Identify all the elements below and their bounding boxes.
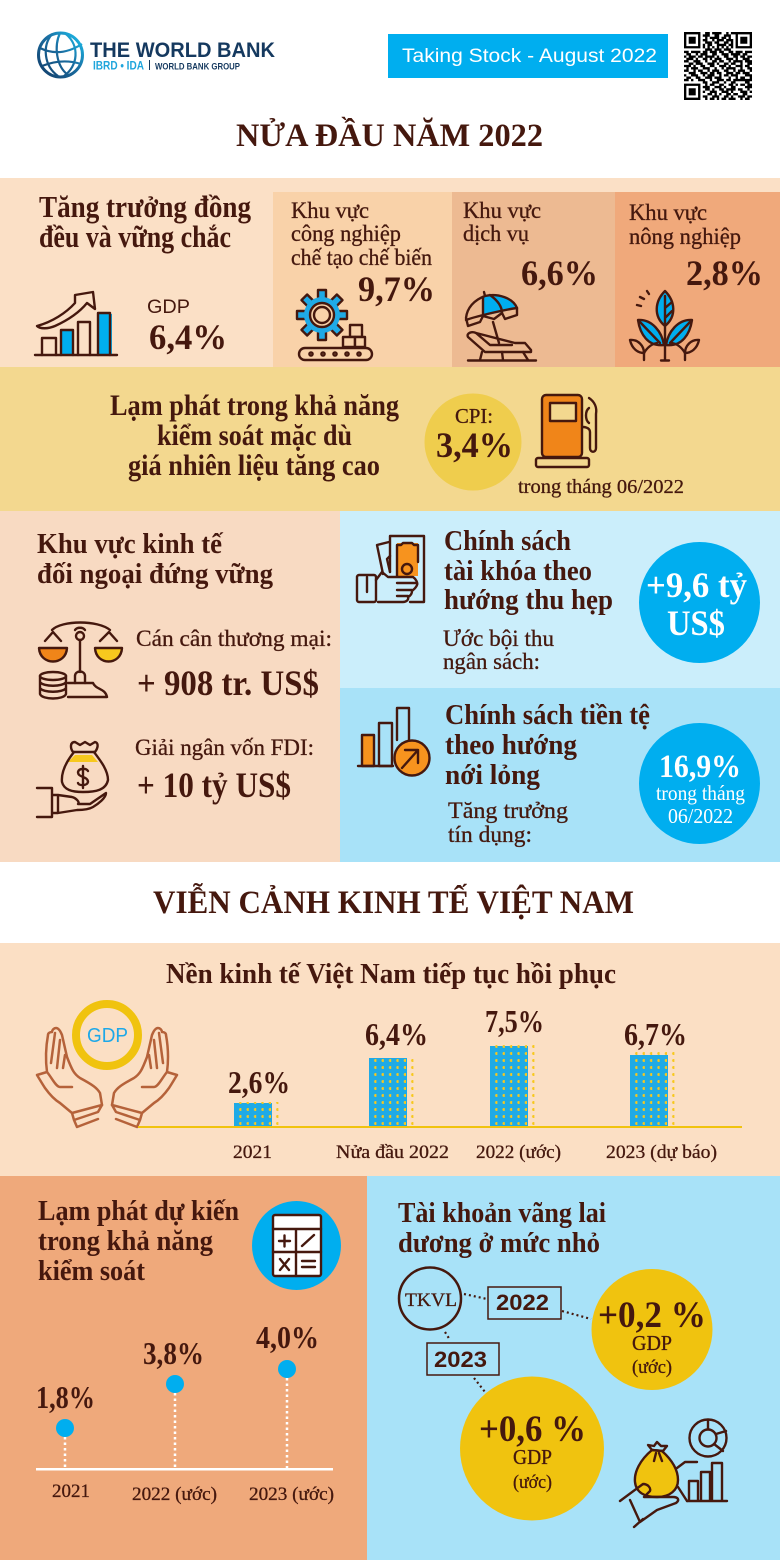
circle: credit value: 16,9% — [659, 749, 741, 785]
logo: The World Bank — [38, 33, 275, 77]
lollipop chart: inflation: 2021 — [52, 1481, 90, 1502]
circle: 2022 current account — [592, 1269, 712, 1390]
label: budget surplus — [443, 626, 554, 674]
heading: current account — [398, 1197, 606, 1259]
panel: services sector — [452, 192, 615, 368]
sector label: chế tạo chế biến — [291, 245, 432, 270]
panel: current account — [367, 1176, 780, 1560]
panel: GDP recovery chart — [0, 943, 780, 1176]
icon: hands holding GDP ring: GDP — [87, 1025, 128, 1047]
icon: money in hand — [357, 536, 424, 602]
circle: 2022 current account: (ước) — [632, 1357, 672, 1378]
circle: surplus value — [639, 542, 760, 663]
lollipop chart: inflation: 2023 (ước) — [249, 1484, 334, 1505]
icon: gear and conveyor — [297, 290, 372, 360]
panel: agriculture sector — [615, 192, 780, 368]
label: credit growth: Tăng trưởng — [448, 798, 569, 823]
bar chart: GDP growth — [138, 1003, 742, 1163]
report tag — [388, 34, 668, 78]
label: budget surplus: ngân sách: — [443, 649, 540, 674]
heading: fiscal policy — [444, 525, 613, 616]
sector label — [463, 198, 541, 246]
bar chart: GDP growth: 2021 — [233, 1142, 272, 1163]
diagram: current account links: 2023 — [434, 1347, 487, 1372]
label: credit growth — [448, 798, 569, 847]
heading: inflation — [110, 389, 399, 482]
bar chart: GDP growth: Nửa đầu 2022 — [336, 1142, 449, 1163]
CPI circle — [424, 394, 522, 490]
heading: inflation forecast — [38, 1195, 239, 1287]
circle: 2022 current account: +0,2 % — [598, 1295, 706, 1336]
heading: inflation forecast: Lạm phát dự kiến — [38, 1195, 239, 1227]
sector label: Khu vực — [291, 198, 369, 223]
icon: hands holding GDP ring — [37, 1004, 177, 1127]
logo: The World Bank: IBRD • IDA — [93, 58, 144, 72]
icon: calculator — [252, 1201, 341, 1290]
heading: fiscal policy: hướng thu hẹp — [444, 584, 613, 616]
QR code — [684, 33, 752, 99]
icon: growth chart — [35, 292, 117, 355]
icon: plant — [630, 291, 699, 360]
icon: money bag, pie and bars — [620, 1420, 727, 1527]
heading: inflation: Lạm phát trong khả năng — [110, 389, 399, 422]
lollipop chart: inflation — [36, 1319, 334, 1505]
bar chart: GDP growth: 2022 (ước) — [476, 1142, 561, 1163]
trade balance figure — [136, 626, 332, 703]
report tag: Taking Stock - August 2022 — [402, 46, 657, 67]
circle: 2023 current account: GDP — [513, 1445, 552, 1469]
heading: monetary policy: nới lỏng — [445, 759, 540, 791]
GDP figure: 6,4% — [149, 317, 227, 357]
icon: bars with arrow — [358, 708, 430, 776]
circle: 2023 current account: (ước) — [513, 1472, 552, 1493]
heading: monetary policy — [445, 699, 650, 791]
heading: recovery: Nền kinh tế Việt Nam tiếp tục hồi phục — [166, 958, 616, 990]
circle: 2023 current account: +0,6 % — [479, 1409, 586, 1450]
logo: The World Bank: WORLD BANK GROUP — [155, 62, 240, 72]
value: 2,8% — [686, 253, 763, 293]
sector label: Khu vực — [629, 200, 707, 225]
title: Vietnam economic outlook: VIỄN CẢNH KINH TẾ VIỆT NAM — [153, 882, 634, 921]
bar chart: GDP growth: 7,5% — [485, 1003, 544, 1039]
panel: steady growth — [0, 178, 780, 368]
heading: external sector: Khu vực kinh tế — [37, 528, 224, 560]
heading: inflation forecast: trong khả năng — [38, 1225, 213, 1257]
panel: fiscal policy — [340, 511, 780, 688]
lollipop chart: inflation: 3,8% — [143, 1335, 204, 1371]
heading: steady growth: đều và vững chắc — [39, 219, 231, 254]
CPI circle: CPI: — [455, 404, 493, 428]
heading: inflation: kiểm soát mặc dù — [157, 419, 352, 452]
FDI figure — [135, 735, 314, 805]
circle: surplus value: +9,6 tỷ — [646, 565, 747, 605]
label: budget surplus: Ước bội thu — [443, 626, 554, 651]
panel: monetary policy — [340, 688, 780, 862]
bar chart: GDP growth: 6,7% — [624, 1016, 687, 1052]
heading: monetary policy: theo hướng — [445, 729, 577, 761]
heading: current account: dương ở mức nhỏ — [398, 1227, 600, 1259]
icon: trade balance scale — [39, 622, 122, 698]
heading: external sector: đối ngoại đứng vững — [37, 558, 273, 590]
heading: inflation: giá nhiên liệu tăng cao — [128, 449, 380, 482]
FDI figure: + 10 tỷ US$ — [137, 765, 291, 805]
circle: credit value: 06/2022 — [668, 804, 733, 828]
circle: 2022 current account: GDP — [632, 1331, 672, 1355]
heading: current account: Tài khoản vãng lai — [398, 1197, 606, 1229]
icon: beach umbrella and chair — [466, 292, 536, 360]
diagram: current account links: 2022 — [496, 1290, 549, 1315]
lollipop chart: inflation: 1,8% — [36, 1379, 95, 1415]
sector label — [291, 198, 432, 270]
title: first half 2022: NỬA ĐẦU NĂM 2022 — [236, 115, 543, 154]
diagram: current account links: TKVL — [405, 1290, 457, 1311]
lollipop chart: inflation: 2022 (ước) — [132, 1484, 217, 1505]
bar chart: GDP growth: 6,4% — [365, 1016, 428, 1052]
diagram: current account links — [399, 1268, 591, 1392]
panel: inflation under control — [0, 367, 780, 511]
heading: steady growth: Tăng trưởng đồng — [39, 189, 251, 224]
circle: credit value — [639, 723, 760, 844]
header: logo, report tag and QR code — [38, 33, 752, 99]
icon: money bag in hand — [37, 742, 108, 817]
value: 9,7% — [358, 269, 435, 309]
sector label: dịch vụ — [463, 221, 529, 246]
sector label: nông nghiệp — [629, 224, 741, 249]
trade balance figure: + 908 tr. US$ — [137, 663, 319, 703]
panel: external sector — [0, 511, 340, 862]
heading: inflation forecast: kiểm soát — [38, 1255, 145, 1287]
trade balance figure: Cán cân thương mại: — [136, 626, 332, 651]
heading: fiscal policy: tài khóa theo — [444, 555, 592, 587]
bar chart: GDP growth: 2,6% — [228, 1064, 290, 1100]
heading: fiscal policy: Chính sách — [444, 525, 571, 557]
circle: 2023 current account — [460, 1376, 604, 1520]
sector label: Khu vực — [463, 198, 541, 223]
sector label: công nghiệp — [291, 221, 401, 246]
circle: credit value: trong tháng — [656, 781, 745, 805]
heading: monetary policy: Chính sách tiền tệ — [445, 699, 650, 731]
lollipop chart: inflation: 4,0% — [256, 1319, 319, 1355]
GDP figure — [147, 297, 227, 357]
panel: manufacturing sector — [273, 192, 452, 368]
value: 6,6% — [521, 253, 598, 293]
icon: fuel pump — [536, 395, 596, 467]
CPI circle: 3,4% — [436, 425, 513, 465]
bar chart: GDP growth: 2023 (dự báo) — [606, 1142, 717, 1163]
GDP figure: GDP — [147, 297, 190, 318]
icon: globe — [38, 33, 82, 77]
sector label — [629, 200, 741, 249]
label: credit growth: tín dụng: — [448, 822, 532, 847]
heading: external sector — [37, 528, 273, 590]
heading: steady growth — [39, 189, 251, 254]
panel: inflation forecast — [0, 1176, 367, 1560]
note: June 2022: trong tháng 06/2022 — [518, 476, 684, 498]
logo: The World Bank: THE WORLD BANK — [90, 38, 275, 62]
FDI figure: Giải ngân vốn FDI: — [135, 735, 314, 760]
circle: surplus value: US$ — [667, 603, 725, 643]
